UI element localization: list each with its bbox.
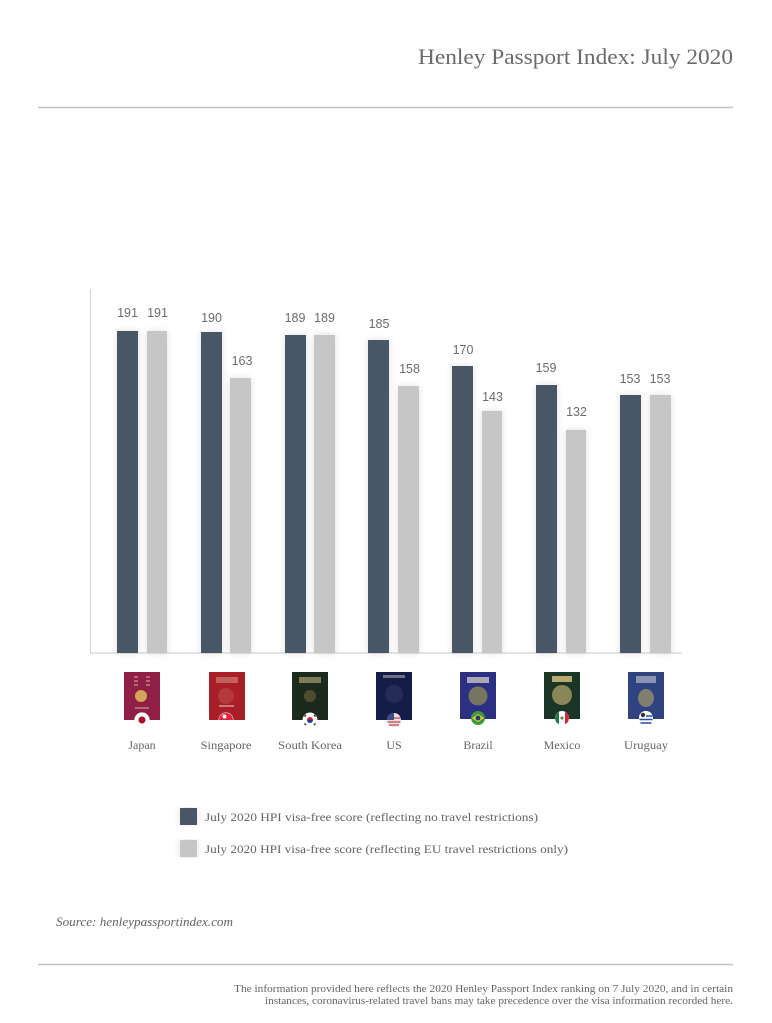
bars: Uruguay xyxy=(620,372,671,653)
country labels: Japan xyxy=(128,738,156,752)
bars: South Korea xyxy=(285,311,335,653)
bars: Japan: 191 xyxy=(147,306,168,320)
legend: no travel restrictions: July 2020 HPI visa-free score (reflecting no travel restrictions) xyxy=(205,810,538,824)
source: Source: henleypassportindex.com xyxy=(56,915,233,929)
country labels xyxy=(128,738,668,752)
bars: US: 158 xyxy=(399,362,420,376)
bars: Japan: 191 xyxy=(117,306,138,320)
country labels: Singapore xyxy=(200,738,252,752)
bars: Mexico: 132 xyxy=(566,405,587,419)
bars: US: 185 xyxy=(369,317,389,331)
bars: Uruguay: 153 xyxy=(650,372,670,386)
bars: Singapore xyxy=(201,311,252,653)
bars: Uruguay: 153 xyxy=(620,372,640,386)
bar chart xyxy=(90,289,682,653)
legend: EU travel restrictions xyxy=(180,840,568,857)
passport: Japan xyxy=(124,672,160,728)
bars: Mexico xyxy=(536,361,587,653)
passport: US xyxy=(376,672,412,727)
passport: Singapore xyxy=(209,672,245,728)
bars: Mexico: 159 xyxy=(536,361,556,375)
bars: Brazil xyxy=(452,343,503,653)
passport: Mexico xyxy=(544,672,580,725)
bars: Singapore: 163 xyxy=(232,354,252,368)
footnote: The information provided here reflects the 2020 Henley Passport Index ranking on 7 July 2020, and in certain xyxy=(234,984,733,995)
country labels: South Korea xyxy=(278,738,343,752)
country labels: Brazil xyxy=(463,738,493,752)
passport: Brazil xyxy=(460,672,496,725)
country labels: Uruguay xyxy=(624,738,668,752)
bars: Singapore: 190 xyxy=(201,311,222,325)
country labels: Mexico xyxy=(544,738,580,752)
country labels: US xyxy=(386,738,402,752)
footnote xyxy=(234,984,733,1007)
legend xyxy=(180,808,568,857)
bars: US xyxy=(368,317,420,653)
legend: no travel restrictions xyxy=(180,808,538,825)
bars: Brazil: 143 xyxy=(482,390,503,404)
bars: South Korea: 189 xyxy=(285,311,305,325)
passport: Uruguay xyxy=(628,672,664,725)
footnote: instances, coronavirus-related travel bans may take precedence over the visa information recorded here. xyxy=(265,996,733,1007)
bars: Brazil: 170 xyxy=(453,343,473,357)
title: Henley Passport Index: July 2020 xyxy=(418,44,733,69)
passport: South Korea xyxy=(292,672,328,728)
legend: EU travel restrictions: July 2020 HPI visa-free score (reflecting EU travel restrictions only) xyxy=(205,842,568,856)
bars: Japan xyxy=(117,306,168,653)
bars: South Korea: 189 xyxy=(314,311,335,325)
